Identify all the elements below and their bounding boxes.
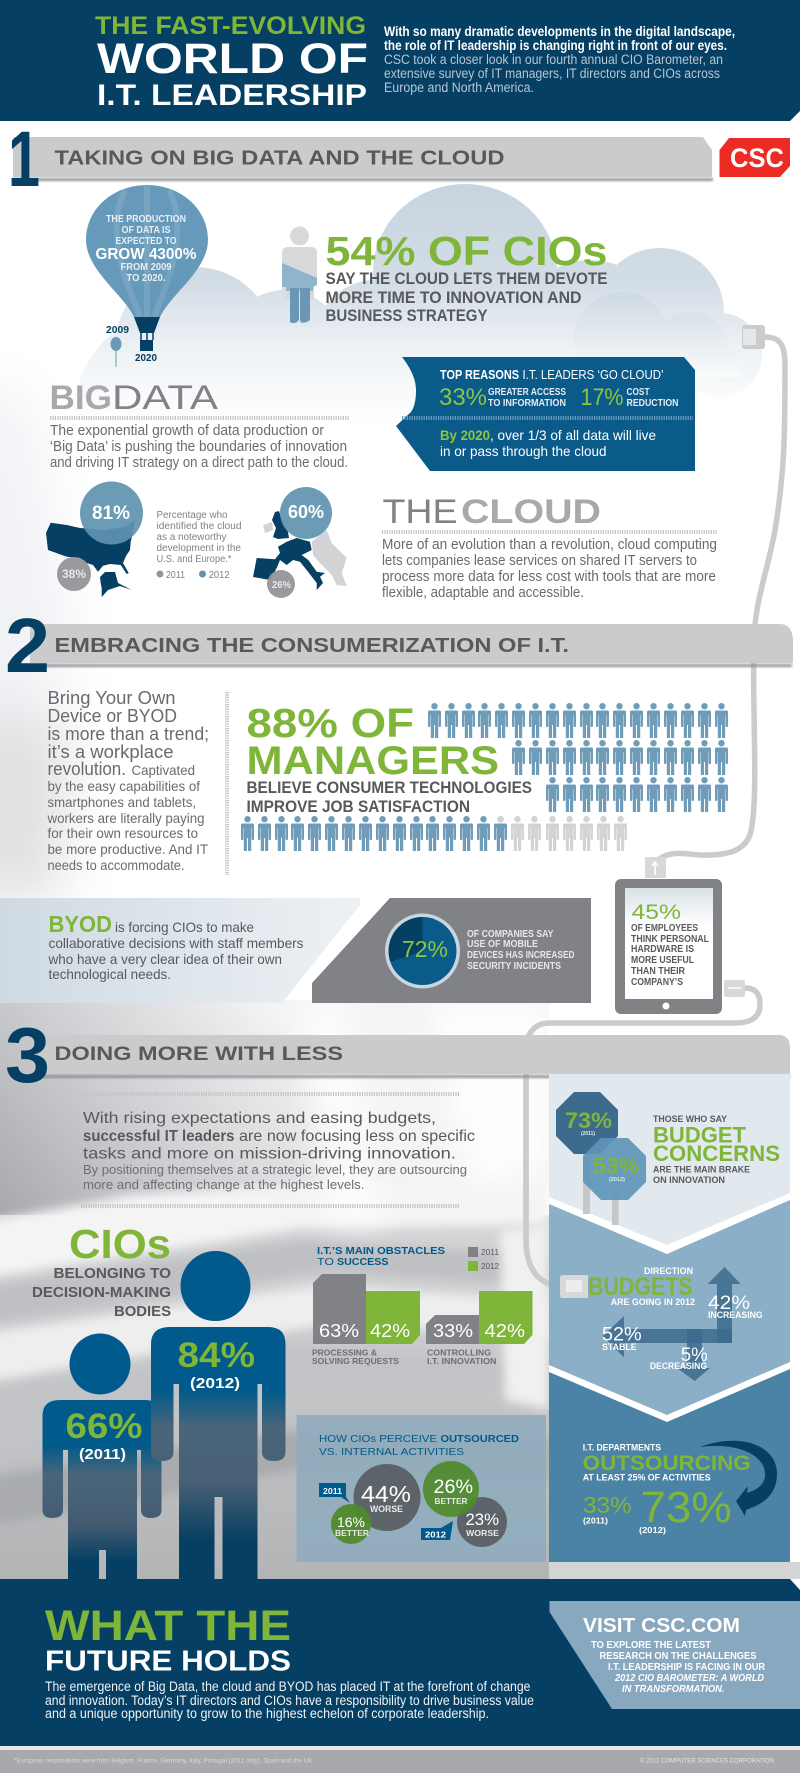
title: THE FAST-EVOLVING [95,12,366,40]
background: right column base [549,1000,800,1579]
header intro text: CSC took a closer look in our fourth annual CIO Barometer, an [384,52,723,67]
panel: top reasons: TO INFORMATION [488,397,566,409]
bubble 44%: 44% [361,1481,411,1507]
bubble 23%: 23% [466,1511,499,1529]
USB plug: top [742,325,765,349]
The Cloud heading [382,493,601,531]
section 3 intro text [83,1110,475,1192]
curved arrow [700,1441,777,1516]
footer strip: *European respondents were from Belgium, France, Germany, Italy, Portugal (2011 only), Spain and the UK. [14,1759,314,1765]
BYOD text: it’s a workplace [48,741,174,762]
panel: budgets direction: ARE GOING IN 2012 [611,1297,695,1308]
panel: outsourced vs internal: HOW CIOs PERCEIVE [319,1433,437,1445]
bubble 26%: BETTER [434,1496,468,1506]
chart: main obstacles to success: PROCESSING & [312,1348,377,1358]
tablet [615,879,722,1014]
panel: 72% security incidents: USE OF MOBILE [467,939,538,950]
USB plug: budgets [560,1275,588,1298]
panel: budget concerns: ON INNOVATION [653,1175,725,1186]
legend: percentage text: Percentage who [156,510,228,521]
chart title: SUCCESS [337,1256,388,1268]
stop signs [583,1150,590,1214]
bars [313,1274,366,1344]
section 3 intro text: more and affecting change at the highest levels. [83,1178,364,1192]
tablet: 45% [632,901,681,924]
BYOD text: revolution. [48,758,126,779]
balloon: FROM 2009 [120,262,172,273]
footer panel: what the future holds: FUTURE HOLDS [45,1646,291,1678]
panel: budget concerns: 53% [593,1154,639,1178]
panel: budget concerns: CONCERNS [653,1141,780,1166]
person 2011 66% [42,1334,162,1579]
CSC logo [720,138,790,177]
panel: top reasons: REDUCTION [626,397,678,409]
panel: BYOD callout: collaborative decisions with staff members [48,935,304,951]
panel: 72% security incidents [312,898,591,1003]
chart title [317,1245,445,1268]
panel: budgets direction: 42% [708,1293,750,1314]
panel: BYOD callout: BYOD [48,911,112,937]
BYOD text: Captivated [132,762,195,778]
tablet: HARDWARE IS [631,944,694,955]
USB plug: tablet bottom [724,980,745,997]
88% headline: IMPROVE JOB SATISFACTION [246,798,470,816]
The Cloud text: More of an evolution than a revolution, cloud computing [382,537,717,553]
section 1 heading bar: TAKING ON BIG DATA AND THE CLOUD [54,148,504,170]
legend: percentage text: U.S. and Europe.* [156,554,232,565]
88% headline: MANAGERS [246,739,499,783]
legend: percentage text [156,510,242,581]
Big Data text: The exponential growth of data production or [50,423,324,439]
legend: percentage text: 2012 [209,570,230,581]
tablet: OF EMPLOYEES [631,923,698,934]
title: I.T. LEADERSHIP [97,79,367,112]
panel: BYOD callout: is forcing CIOs to make [115,919,254,935]
panel: 72% security incidents: DEVICES HAS INCREASED [467,950,574,961]
chart: main obstacles to success: I.T. INNOVATION [427,1356,496,1366]
CIOs heading: CIOs [69,1221,171,1267]
panel: outsourcing: 33% [583,1492,632,1518]
tablet: COMPANY’S [631,977,683,988]
bubble 16% [331,1504,371,1544]
panel: visit csc.com: IN TRANSFORMATION. [622,1683,725,1695]
tag 2011: 2011 [323,1486,342,1496]
chart: main obstacles to success: CONTROLLING [427,1348,491,1358]
BYOD text: for their own resources to [48,825,198,841]
88% headline: 88% OF [246,700,414,746]
CIOs heading [32,1221,171,1320]
legend: percentage text: as a noteworthy [156,532,226,543]
panel: top reasons [396,357,695,471]
panel: top reasons: COST [626,386,650,398]
section 3 intro text: are now focusing less on specific [239,1128,475,1145]
The Cloud text: process more data for less cost with tools that are more [382,569,716,585]
chart: main obstacles to success: 42% [484,1321,525,1341]
header intro text: With so many dramatic developments in the digital landscape, [384,24,735,39]
BYOD text: Bring Your Own [48,687,176,708]
tablet: THINK PERSONAL [631,934,709,945]
header intro text: extensive survey of IT managers, IT directors and CIOs across [384,66,720,81]
54% headline: 54% OF CIOs [326,228,608,274]
chart title: TO [317,1256,334,1268]
BYOD text: smartphones and tablets, [48,794,196,810]
panel: outsourcing [549,1369,790,1562]
header intro text [384,24,735,95]
number 1: 1 [8,114,40,203]
panel: visit csc.com: I.T. LEADERSHIP IS FACING IN OUR [608,1661,765,1673]
legend: percentage text: development in the [156,543,241,554]
person icon 54% [282,226,317,323]
section 2 heading bar [5,603,793,689]
CSC logo: CSC [730,143,784,173]
legend: percentage text: identified the cloud [156,521,242,532]
Big Data heading [50,379,218,417]
footer panel: what the future holds [0,1579,800,1746]
88% headline: BELIEVE CONSUMER TECHNOLOGIES [246,779,532,797]
number 3: 3 [5,1011,50,1099]
panel: visit csc.com: TO EXPLORE THE LATEST [591,1639,712,1651]
balloon: OF DATA IS [122,225,171,236]
bubble 26% [423,1461,479,1517]
panel: budget concerns [549,1074,790,1245]
arrows [603,1267,741,1381]
background: soft grey fade on left [0,380,70,900]
USB cable: section 3 [526,1050,562,1286]
panel: 72% security incidents: SECURITY INCIDENTS [467,961,561,972]
background: photo strip under right column [549,1562,800,1579]
BYOD text [47,687,209,873]
panel: visit csc.com [550,1601,800,1709]
bubble 23% [457,1497,507,1547]
panel: budgets direction: 5% [681,1345,708,1366]
tag 2011 [319,1483,350,1503]
person 2012 84% [151,1251,286,1579]
The Cloud text: lets companies lease services on shared IT servers to [382,553,697,569]
54% headline: MORE TIME TO INNOVATION AND [326,289,582,307]
panel: budget concerns: THOSE WHO SAY [653,1114,728,1125]
panel: outsourcing: AT LEAST 25% OF ACTIVITIES [583,1473,711,1484]
circle 81%: 81% [92,503,130,524]
small cloud overlay [574,292,740,392]
bubble 16%: 16% [337,1514,365,1530]
USB plug: tablet top [645,857,666,878]
balloon: THE PRODUCTION [106,214,186,225]
panel: budgets direction: BUDGETS [588,1273,693,1301]
chart legend [468,1247,499,1271]
clouds [72,184,762,427]
person 2012 84%: (2012) [190,1375,240,1392]
panel: budget concerns: (2012) [609,1177,625,1183]
CIOs heading: BODIES [114,1304,171,1320]
chart: main obstacles to success [312,1245,532,1366]
bubble 23%: WORSE [466,1528,499,1538]
panel: top reasons: 33% [439,384,487,411]
section 3 intro text: With rising expectations and easing budgets, [83,1110,436,1127]
54% headline [326,228,608,325]
chart title: I.T.’S MAIN OBSTACLES [317,1245,445,1257]
bubble 26%: 26% [434,1477,473,1498]
chart legend: 2011 [481,1247,499,1257]
Big Data heading: BIG [50,379,112,417]
Big Data heading: DATA [112,379,218,417]
bubble 44%: WORSE [370,1504,403,1514]
88% headline [246,700,532,816]
panel: top reasons: , over 1/3 of all data will live [490,427,656,443]
footer panel: what the future holds: and a unique opportunity to grow to the highest echelon of corporate leadership. [45,1706,489,1721]
tablet: THAN THEIR [631,966,686,977]
balloon: GROW 4300% [96,246,197,263]
panel: top reasons: 17% [580,384,624,411]
BYOD text: by the easy capabilities of [48,778,200,794]
panel: budget concerns: BUDGET [653,1122,747,1148]
panel: top reasons: GREATER ACCESS [488,386,566,398]
panel: outsourced vs internal: VS. INTERNAL ACTIVITIES [319,1446,464,1458]
chart: main obstacles to success: 63% [319,1321,359,1341]
CIOs heading: DECISION-MAKING [32,1285,171,1301]
balloon: 2020 [135,353,157,364]
The Cloud text [382,537,717,601]
footer panel: what the future holds: and innovation. Today’s IT directors and CIOs have a responsibility to drive business value [45,1693,534,1708]
The Cloud heading: CLOUD [461,493,601,531]
balloon: TO 2020. [126,273,166,284]
Big Data text [50,423,348,471]
bubble 16%: BETTER [335,1528,369,1538]
panel: outsourcing: OUTSOURCING [583,1451,751,1475]
person 2011 66%: 66% [66,1407,142,1446]
map: USA [46,482,143,597]
circle 38%: 38% [62,569,86,581]
small balloon [110,337,122,367]
tag 2012 [421,1521,453,1540]
person 2012 84%: 84% [178,1336,255,1375]
header band [0,0,800,121]
person 2011 66%: (2011) [79,1446,126,1463]
panel: top reasons: in or pass through the cloud [440,443,606,459]
panel: outsourcing: (2011) [583,1516,608,1526]
panel: budget concerns: (2011) [581,1131,595,1137]
balloon: EXPECTED TO [116,236,177,247]
section 3 intro text: tasks and more on mission-driving innovation. [83,1146,456,1162]
Big Data text: and driving IT strategy on a direct path to the cloud. [50,455,348,471]
title [95,12,368,112]
panel: budgets direction: DIRECTION [644,1266,693,1277]
tablet: MORE USEFUL [631,955,694,966]
BYOD text: Device or BYOD [48,705,177,726]
background: photo of highway, section 3 [0,1000,549,1585]
balloon [86,185,208,367]
panel: top reasons: I.T. LEADERS ‘GO CLOUD’ [522,367,664,382]
people pictogram [241,703,728,851]
footer panel: what the future holds: The emergence of Big Data, the cloud and BYOD has placed IT at the forefront of change [45,1679,530,1694]
panel: outsourcing: I.T. DEPARTMENTS [583,1443,661,1454]
balloon: 2009 [106,325,129,336]
panel: budgets direction: STABLE [602,1342,637,1352]
header intro text: the role of IT leadership is changing right in front of our eyes. [384,38,727,53]
panel: budget concerns: 73% [565,1108,612,1133]
Big Data text: ‘Big Data’ is pushing the boundaries of innovation [50,439,347,455]
panel: budget concerns: ARE THE MAIN BRAKE [653,1164,750,1176]
panel: top reasons: TOP REASONS [440,367,519,382]
footer strip [0,1746,800,1773]
section 3 heading bar [5,1011,790,1099]
bubble 44% [354,1464,420,1531]
circle 60%: 60% [288,502,324,522]
map: Europe [253,487,347,598]
panel: BYOD callout: who have a very clear idea of their own [48,951,282,967]
panel: outsourcing: (2012) [639,1525,666,1535]
panel: budgets direction: INCREASING [708,1310,763,1320]
panel: outsourcing: 73% [641,1483,732,1532]
The Cloud text: flexible, adaptable and accessible. [382,585,584,601]
title: WORLD OF [97,35,368,83]
chart legend: 2012 [481,1261,499,1271]
panel: budgets direction: DECREASING [650,1361,707,1371]
panel: budgets direction: 52% [602,1325,642,1346]
panel: visit csc.com: RESEARCH ON THE CHALLENGES [600,1650,756,1662]
circle 26%: 26% [272,580,291,591]
section 1 heading bar [8,114,713,203]
tag 2012: 2012 [425,1530,446,1540]
panel: visit csc.com: VISIT CSC.COM [583,1615,740,1637]
section 3 intro text: By positioning themselves at a strategic level, they are outsourcing [83,1163,467,1177]
USB cable from cloud to tablet [526,337,785,1286]
header intro text: Europe and North America. [384,80,534,95]
54% headline: SAY THE CLOUD LETS THEM DEVOTE [326,270,608,288]
legend: percentage text: 2011 [166,570,185,581]
BYOD text: needs to accommodate. [48,857,184,873]
panel: BYOD callout: technological needs. [48,966,171,982]
section 2 heading bar: EMBRACING THE CONSUMERIZATION OF I.T. [54,635,569,657]
panel: BYOD callout [0,898,360,1003]
footer panel: what the future holds: WHAT THE [45,1602,291,1650]
BYOD text: workers are literally paying [47,810,204,826]
chart: main obstacles to success: 42% [370,1321,410,1341]
panel: outsourced vs internal [296,1415,546,1562]
panel: outsourced vs internal: OUTSOURCED [440,1433,519,1445]
panel: 72% security incidents: 72% [402,936,448,962]
panel: visit csc.com: 2012 CIO BAROMETER: A WORLD [614,1672,764,1684]
section 3 intro text: successful IT leaders [83,1128,235,1145]
section 3 heading bar: DOING MORE WITH LESS [54,1043,343,1065]
panel: budgets direction [549,1200,790,1415]
54% headline: BUSINESS STRATEGY [326,307,488,325]
chart: main obstacles to success: 33% [433,1321,473,1341]
number 2: 2 [5,603,50,689]
chart: main obstacles to success: SOLVING REQUESTS [312,1356,399,1366]
BYOD text: be more productive. And IT [48,841,208,857]
BYOD text: is more than a trend; [48,723,209,744]
The Cloud heading: THE [382,493,458,531]
footer strip: © 2012 COMPUTER SCIENCES CORPORATION [640,1758,774,1765]
CIOs heading: BELONGING TO [54,1266,171,1282]
panel: top reasons: By 2020 [440,427,490,443]
panel: 72% security incidents: OF COMPANIES SAY [467,929,554,940]
